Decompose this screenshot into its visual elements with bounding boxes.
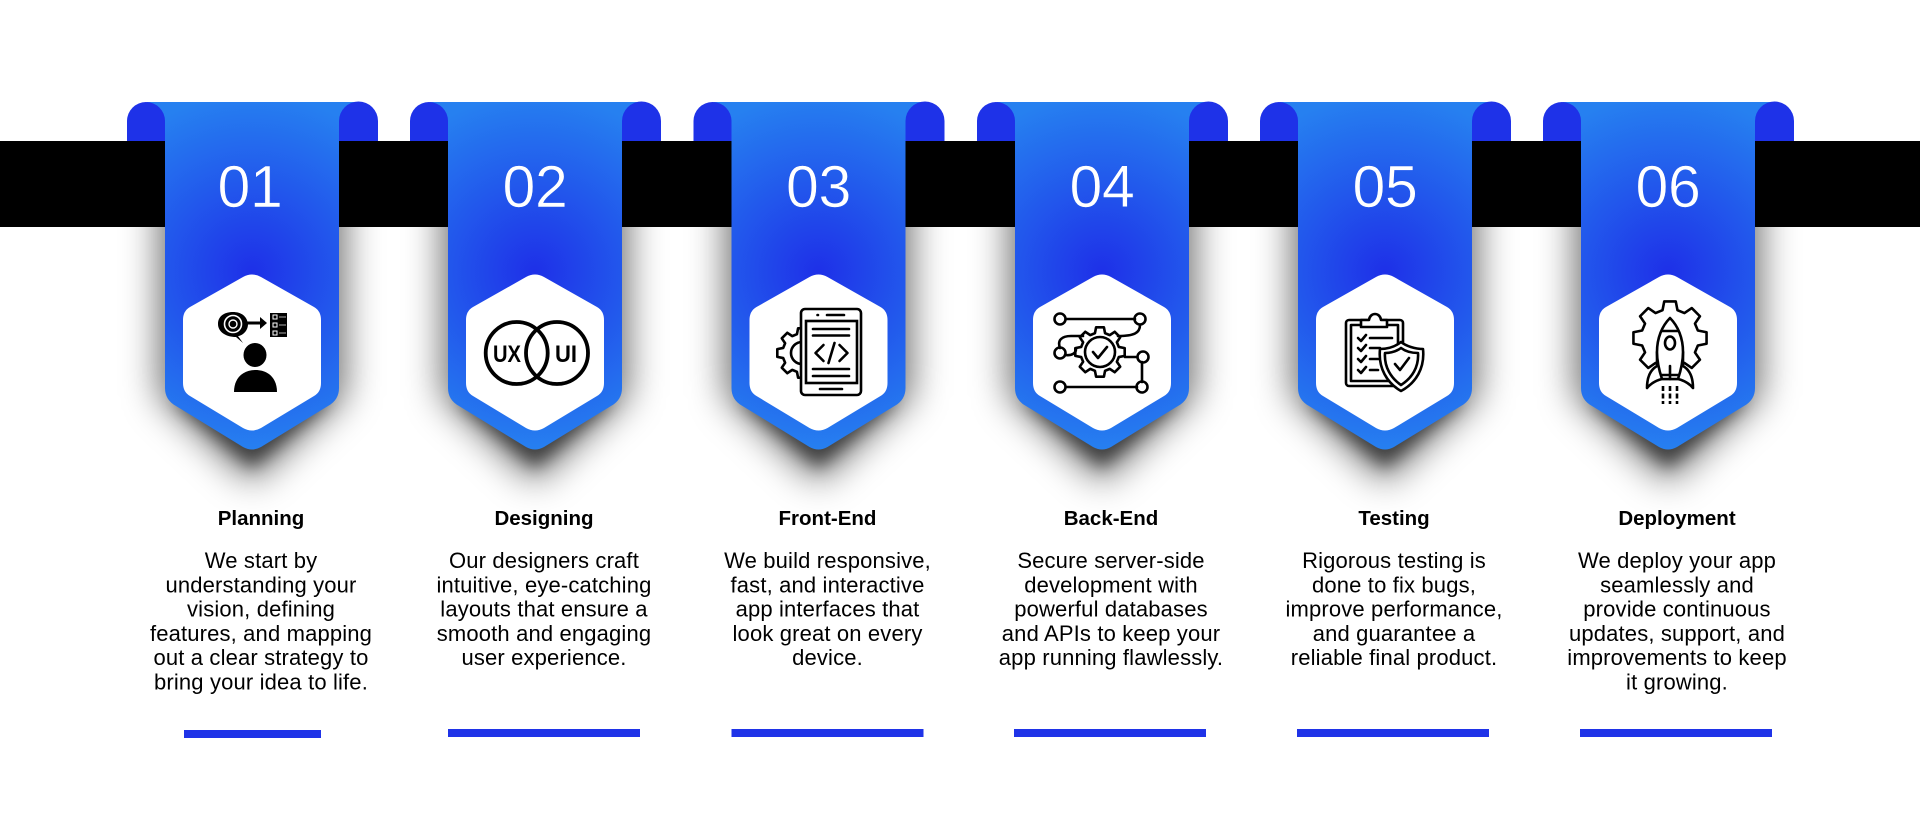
icon: target to checklist and person bbox=[218, 312, 287, 392]
ribbon 06 bbox=[1543, 102, 1794, 450]
ribbon 04 bbox=[977, 102, 1228, 450]
wide drop shadows bbox=[159, 170, 1761, 482]
text: back-end description: powerful databases bbox=[1014, 596, 1208, 622]
black horizontal band bbox=[0, 141, 1920, 227]
text: deployment description: seamlessly and bbox=[1600, 572, 1754, 597]
text: testing description: Rigorous testing is bbox=[1302, 548, 1486, 573]
ribbon 03 bbox=[694, 102, 944, 450]
panel: step 03 front-end bbox=[694, 102, 944, 737]
accent bar 04 bbox=[1014, 729, 1206, 737]
text: testing description: and guarantee a bbox=[1313, 621, 1476, 646]
ribbon 02 bbox=[410, 102, 661, 450]
ribbon 01 bbox=[127, 102, 378, 450]
white hexagon 06 bbox=[1599, 274, 1737, 430]
white hexagon 01 bbox=[183, 274, 321, 430]
panel: step 01 planning bbox=[127, 102, 378, 738]
text: planning description: understanding your bbox=[165, 572, 357, 597]
panel: step 04 back-end bbox=[977, 102, 1228, 737]
title: back-end: Back-End bbox=[1064, 507, 1158, 530]
text: planning description: We start by bbox=[205, 548, 317, 573]
text: front-end description: fast, and interactive bbox=[731, 572, 924, 597]
text: designing description: layouts that ensure a bbox=[440, 596, 648, 622]
number 06: 06 bbox=[1635, 154, 1701, 220]
accent bar 01 bbox=[184, 730, 321, 738]
text: back-end description: app running flawlessly. bbox=[999, 645, 1223, 670]
text: deployment description: it growing. bbox=[1626, 669, 1728, 694]
text: deployment description: updates, support, and bbox=[1569, 621, 1785, 646]
text: designing description: user experience. bbox=[461, 645, 627, 670]
text: testing description: improve performance, bbox=[1286, 596, 1502, 622]
text: designing description: Our designers craft bbox=[449, 548, 639, 573]
title: planning: Planning bbox=[218, 507, 304, 530]
text: testing description: done to fix bugs, bbox=[1312, 572, 1476, 597]
icon: rocket and gear bbox=[1633, 301, 1707, 404]
text: front-end description: We build responsive, bbox=[724, 548, 931, 573]
accent bar 03 bbox=[732, 729, 924, 737]
panel: step 06 deployment bbox=[1543, 102, 1794, 737]
ribbon 05 bbox=[1260, 102, 1511, 450]
white hexagon 03 bbox=[750, 274, 888, 430]
number 02: 02 bbox=[502, 154, 568, 220]
number 03: 03 bbox=[786, 154, 851, 220]
text: planning description: out a clear strategy to bbox=[153, 645, 369, 670]
title: designing: Designing bbox=[494, 507, 594, 530]
text: deployment description: provide continuous bbox=[1583, 596, 1771, 622]
title: front-end: Front-End bbox=[779, 507, 876, 530]
accent bar 02 bbox=[448, 729, 640, 737]
icon: gear with circuit nodes bbox=[1054, 314, 1148, 392]
text: deployment description: We deploy your app bbox=[1578, 548, 1776, 573]
number 04: 04 bbox=[1069, 154, 1135, 220]
icon: UX UI circles bbox=[486, 322, 588, 384]
icon: UX UI circles: UX bbox=[493, 341, 521, 368]
accent bar 05 bbox=[1297, 729, 1489, 737]
panel: step 05 testing bbox=[1260, 102, 1511, 737]
panel: step 02 designing bbox=[410, 102, 661, 737]
icon: UX UI circles: UI bbox=[555, 341, 577, 368]
white hexagon 05 bbox=[1316, 274, 1454, 430]
title: deployment: Deployment bbox=[1618, 507, 1736, 530]
text: planning description: features, and mapping bbox=[150, 621, 372, 646]
text: front-end description: device. bbox=[792, 645, 863, 670]
icon: clipboard checklist and shield bbox=[1346, 314, 1423, 391]
text: back-end description: development with bbox=[1024, 572, 1198, 597]
text: front-end description: look great on every bbox=[733, 621, 922, 646]
number 05: 05 bbox=[1352, 154, 1418, 220]
accent bar 06 bbox=[1580, 729, 1772, 737]
title: testing: Testing bbox=[1358, 507, 1430, 530]
text: designing description: intuitive, eye-catching bbox=[436, 572, 652, 597]
number 01: 01 bbox=[217, 154, 283, 220]
text: front-end description: app interfaces that bbox=[736, 596, 919, 622]
text: deployment description: improvements to keep bbox=[1567, 645, 1787, 670]
text: planning description: bring your idea to life. bbox=[154, 669, 368, 694]
text: designing description: smooth and engaging bbox=[437, 621, 651, 646]
text: back-end description: Secure server-side bbox=[1017, 548, 1205, 573]
text: back-end description: and APIs to keep your bbox=[1002, 621, 1220, 646]
text: testing description: reliable final product. bbox=[1291, 645, 1497, 670]
white hexagon 02 bbox=[466, 274, 604, 430]
white hexagon 04 bbox=[1033, 274, 1171, 430]
icon: tablet with code and gear bbox=[777, 309, 861, 395]
tight shadows under ribbon tips bbox=[172, 400, 1748, 468]
text: planning description: vision, defining bbox=[187, 596, 335, 622]
